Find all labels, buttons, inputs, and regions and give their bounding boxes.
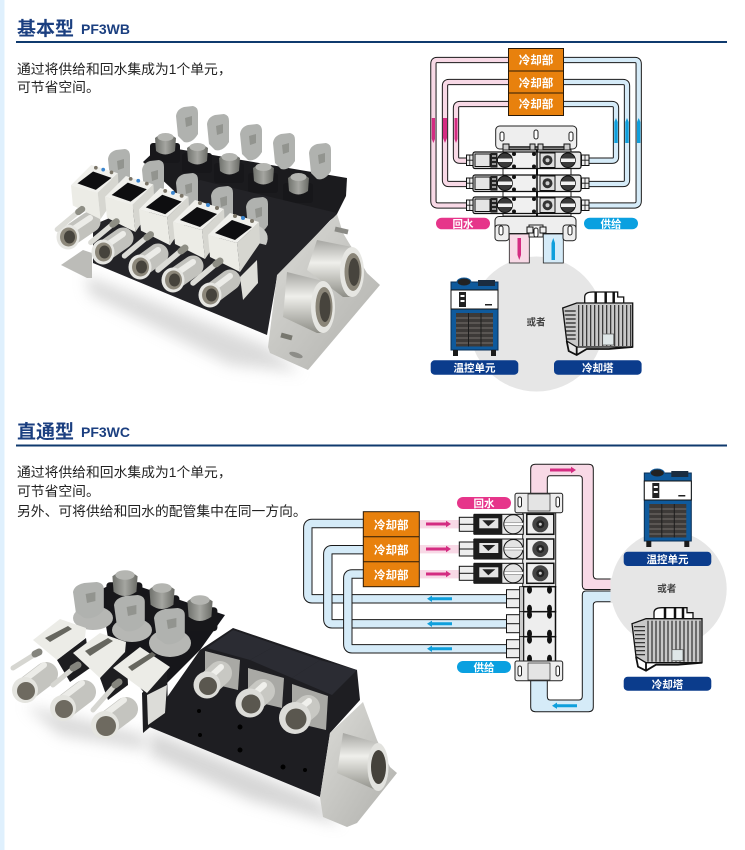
return label: 回水 xyxy=(474,497,495,510)
section 1 description: 可节省空间。 xyxy=(17,80,100,95)
return arrows xyxy=(432,118,458,143)
return branch pipes xyxy=(419,520,460,578)
cooling unit boxes: 冷却部 xyxy=(374,518,409,532)
temperature control unit label xyxy=(431,360,518,375)
bottom bracket xyxy=(495,216,576,241)
top bracket xyxy=(496,126,577,151)
cooling unit boxes xyxy=(363,512,419,587)
diagram: straight type piping xyxy=(308,464,727,712)
supply arrows xyxy=(614,118,640,143)
supply label: 供给 xyxy=(600,218,622,230)
section 2 description xyxy=(17,465,307,519)
supply pipes (blue) xyxy=(563,60,639,206)
cooling unit boxes xyxy=(508,48,564,116)
icon: cooling tower xyxy=(563,292,633,355)
or label: 或者 xyxy=(526,316,546,328)
supply side blocks xyxy=(506,586,556,663)
return arrows xyxy=(426,467,576,577)
main supply pipe xyxy=(543,234,563,263)
section 1 heading: basic type: PF3WB xyxy=(81,21,130,37)
cooling tower label: 冷却塔 xyxy=(582,362,614,374)
temperature control unit label: 温控单元 xyxy=(454,362,496,374)
section 2 heading: straight type: PF3WC xyxy=(81,424,130,440)
or label: 或者 xyxy=(657,583,677,595)
flow sensor rows xyxy=(466,150,589,216)
bottom bracket xyxy=(515,661,563,681)
section 1 heading: basic type xyxy=(16,18,727,43)
photo: PF3WC manifold xyxy=(12,570,397,827)
cooling unit boxes: 冷却部 xyxy=(519,53,554,67)
left edge stripe xyxy=(0,0,4,850)
return label: 回水 xyxy=(452,218,474,230)
main return pipe xyxy=(509,234,529,263)
cooling tower label: 冷却塔 xyxy=(652,678,684,691)
section 1 heading: basic type: 基本型 xyxy=(17,18,74,40)
supply loop xyxy=(531,591,612,712)
grey alternative circle xyxy=(469,256,604,392)
return label xyxy=(457,497,511,510)
icon: cooling tower xyxy=(632,608,702,671)
icon: temperature control unit xyxy=(644,469,691,547)
supply label: 供给 xyxy=(474,661,495,674)
circle: alternative sources xyxy=(611,531,727,647)
diagram: basic type piping xyxy=(431,48,642,392)
cooling tower label xyxy=(554,360,642,375)
section 2 description: 通过将供给和回水集成为1个单元， xyxy=(17,465,232,480)
top bracket xyxy=(515,493,563,513)
supply branch pipes xyxy=(308,524,509,649)
flow sensor rows xyxy=(459,513,556,587)
cover: circle edge over pipe ends xyxy=(610,578,612,603)
supply label xyxy=(584,218,638,230)
supply label xyxy=(457,661,511,674)
supply arrows xyxy=(427,596,577,709)
return label xyxy=(436,218,490,230)
cooling unit boxes: 冷却部 xyxy=(519,97,554,111)
section 2 heading: straight type xyxy=(16,421,727,446)
cooling unit boxes: 冷却部 xyxy=(374,543,409,557)
return loop xyxy=(531,464,612,590)
photo: PF3WB manifold xyxy=(56,106,380,372)
cooling unit boxes: 冷却部 xyxy=(374,568,409,582)
return pipes (pink) xyxy=(433,60,509,206)
section 2 description: 另外、可将供给和回水的配管集中在同一方向。 xyxy=(17,504,307,519)
cooling tower label xyxy=(624,677,711,691)
temperature control unit label: 温控单元 xyxy=(646,553,689,566)
section 1 description xyxy=(17,62,232,95)
cooling unit boxes: 冷却部 xyxy=(519,76,554,90)
section 1 description: 通过将供给和回水集成为1个单元， xyxy=(17,62,232,77)
temperature control unit label xyxy=(624,552,711,566)
section 2 heading: straight type: 直通型 xyxy=(17,421,74,443)
icon: temperature control unit xyxy=(451,278,498,356)
section 2 description: 可节省空间。 xyxy=(17,484,100,499)
